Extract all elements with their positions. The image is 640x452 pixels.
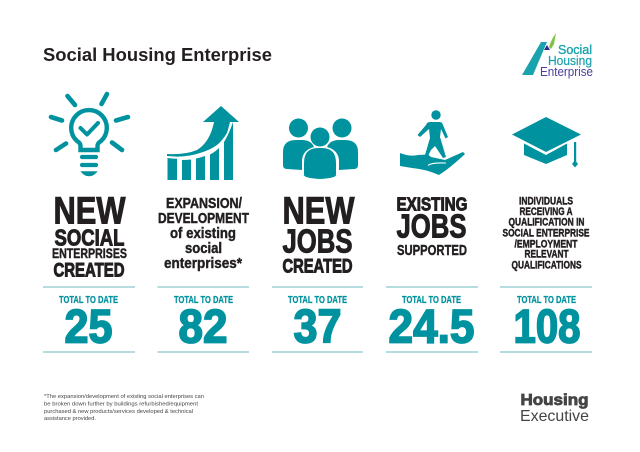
icon: person walking on open hand	[400, 110, 465, 175]
heading: EXISTING JOBS SUPPORTED	[396, 194, 468, 259]
icon: group of people	[283, 118, 358, 179]
footnote: be broken down further by buildings refurbished/equipment	[44, 402, 199, 408]
logo: Housing Executive: Housing	[520, 392, 588, 409]
heading: NEW SOCIAL ENTERPRISES CREATED: CREATED	[54, 260, 124, 282]
heading: individuals receiving a qualification: QUALIFICATION IN	[508, 217, 585, 229]
icon: rising bar chart with arrow	[167, 106, 239, 180]
logo: Housing Executive: Executive	[520, 408, 589, 425]
panel: existing jobs	[386, 110, 478, 352]
panel: expansion and development	[158, 106, 249, 352]
heading: expansion/development of existing social enterprises	[158, 195, 249, 272]
heading: NEW SOCIAL ENTERPRISES CREATED	[52, 190, 127, 282]
heading: NEW JOBS CREATED: CREATED	[282, 256, 352, 278]
number: 37: 37	[294, 300, 342, 352]
footnote: *The expansion/development of existing social enterprises can	[44, 394, 204, 400]
heading: individuals receiving a qualification	[502, 196, 590, 271]
heading: NEW JOBS CREATED	[282, 190, 355, 278]
logo: Social Housing Enterprise: Enterprise	[540, 65, 593, 79]
logo: Social Housing Enterprise: Housing	[548, 54, 592, 68]
heading: NEW JOBS CREATED: JOBS	[282, 224, 352, 260]
logo: Housing Executive	[520, 392, 589, 425]
title: Social Housing Enterprise	[43, 45, 272, 65]
number: 25: 25	[64, 300, 112, 352]
total label: TOTAL TO DATE	[59, 294, 118, 306]
total label: TOTAL TO DATE	[402, 294, 461, 306]
total label: TOTAL TO DATE	[174, 294, 233, 306]
heading: EXISTING JOBS SUPPORTED: JOBS	[396, 208, 466, 246]
heading: individuals receiving a qualification: RELEVANT	[524, 249, 569, 261]
number: 108: 108	[514, 300, 580, 352]
heading: NEW SOCIAL ENTERPRISES CREATED: NEW	[54, 190, 126, 232]
footnote: assistance provided.	[44, 416, 96, 422]
heading: EXISTING JOBS SUPPORTED: SUPPORTED	[397, 243, 467, 259]
logo: Social Housing Enterprise: Social	[558, 43, 592, 57]
logo: Social Housing Enterprise	[522, 33, 593, 79]
icon: graduation cap	[512, 117, 581, 168]
heading: NEW SOCIAL ENTERPRISES CREATED: ENTERPRISES	[52, 245, 127, 261]
total label: TOTAL TO DATE	[288, 294, 347, 306]
heading: expansion/development of existing social enterprises: EXPANSION/	[166, 195, 243, 212]
heading: individuals receiving a qualification: SOCIAL ENTERPRISE	[502, 228, 590, 240]
heading: EXISTING JOBS SUPPORTED: EXISTING	[396, 194, 468, 214]
heading: individuals receiving a qualification: INDIVIDUALS	[519, 196, 573, 208]
heading: expansion/development of existing social enterprises: DEVELOPMENT	[158, 210, 249, 227]
panel: new social enterprises	[43, 94, 135, 352]
heading: NEW JOBS CREATED: NEW	[282, 190, 355, 232]
number: 82: 82	[178, 300, 228, 352]
icon: light bulb with tick	[51, 94, 128, 176]
footnote: purchased & new products/services developed & technical	[44, 409, 193, 415]
number: 24.5: 24.5	[388, 300, 474, 352]
panel: new jobs	[272, 118, 363, 352]
heading: individuals receiving a qualification: RECEIVING A	[520, 206, 573, 218]
footnote	[44, 394, 204, 422]
heading: individuals receiving a qualification: QUALIFICATIONS	[512, 259, 582, 271]
heading: expansion/development of existing social enterprises: social	[185, 240, 222, 257]
total label: TOTAL TO DATE	[517, 294, 576, 306]
heading: expansion/development of existing social enterprises: enterprises*	[164, 255, 242, 272]
heading: NEW SOCIAL ENTERPRISES CREATED: SOCIAL	[54, 224, 124, 250]
heading: expansion/development of existing social enterprises: of existing	[170, 225, 236, 242]
panel: qualifications	[500, 117, 592, 352]
heading: individuals receiving a qualification: /EMPLOYMENT	[514, 238, 578, 250]
